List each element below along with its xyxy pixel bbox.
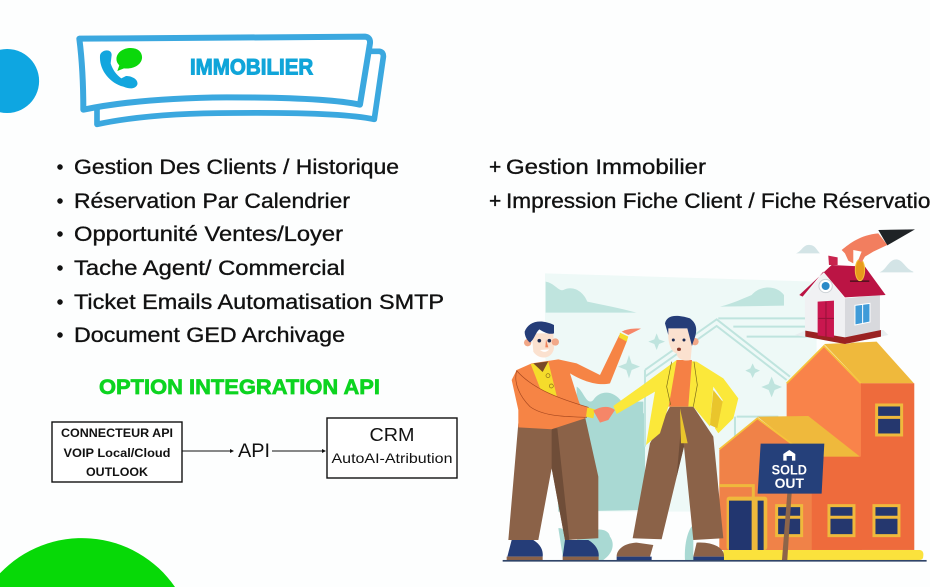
jacket bbox=[613, 360, 738, 445]
man in orange jacket bbox=[507, 322, 641, 560]
list item 4: Tache Agent/ Commercial bbox=[74, 257, 345, 280]
box: connecteur api: VOIP Local/Cloud bbox=[64, 446, 170, 460]
list item 1: Gestion Des Clients / Historique bbox=[74, 156, 399, 179]
sold out sign: OUT bbox=[775, 475, 804, 491]
box: crm: CRM bbox=[370, 425, 414, 445]
feature list: right column bbox=[489, 156, 930, 213]
sold out sign: SOLD bbox=[772, 462, 807, 478]
list item 3: Opportunité Ventes/Loyer bbox=[74, 223, 343, 246]
title banner bbox=[79, 37, 383, 124]
lower right windows bbox=[829, 506, 899, 536]
heading: option integration api: OPTION INTEGRATION API bbox=[99, 376, 380, 399]
right item 1: + bbox=[489, 156, 501, 179]
hand with suit sleeve bbox=[842, 229, 915, 263]
large orange house bbox=[787, 342, 914, 550]
man in yellow jacket bbox=[593, 316, 738, 560]
shoes bbox=[507, 540, 599, 557]
small house on roof bbox=[795, 256, 888, 344]
ground line bbox=[503, 560, 927, 562]
label: api: API bbox=[238, 441, 270, 462]
shoes bbox=[617, 543, 724, 557]
blue decorative circle bbox=[0, 49, 39, 113]
raised hand bbox=[622, 329, 641, 335]
trousers bbox=[633, 407, 723, 540]
box: crm bbox=[327, 418, 457, 478]
door bbox=[719, 486, 767, 551]
trousers bbox=[508, 417, 598, 540]
arrow: api to crm bbox=[272, 449, 326, 453]
icon: green speech bubble bbox=[116, 48, 142, 71]
small orange house bbox=[719, 416, 860, 551]
banner front sheet bbox=[79, 37, 370, 110]
banner back sheet bbox=[97, 51, 383, 124]
sleeve bbox=[516, 371, 588, 417]
handshake bbox=[593, 407, 615, 423]
box: crm: AutoAI-Atribution bbox=[332, 450, 452, 466]
right item 2: Impression Fiche Client / Fiche Réservation bbox=[506, 190, 930, 213]
real estate illustration bbox=[503, 229, 927, 562]
list item 5: Ticket Emails Automatisation SMTP bbox=[74, 291, 444, 314]
coin bbox=[855, 259, 865, 281]
head bbox=[668, 328, 692, 361]
right item 1: Gestion Immobilier bbox=[506, 156, 706, 179]
banner title text: IMMOBILIER bbox=[190, 54, 313, 79]
right item 2: + bbox=[489, 190, 501, 213]
head bbox=[532, 333, 554, 358]
sold out sign bbox=[758, 444, 824, 560]
window bbox=[777, 506, 802, 536]
box: connecteur api bbox=[52, 422, 182, 482]
feature list: left column bbox=[57, 156, 444, 347]
small clouds bbox=[796, 245, 913, 272]
shirt bbox=[669, 360, 692, 407]
arrow: connector to api bbox=[182, 449, 234, 453]
box: connecteur api: CONNECTEUR API bbox=[61, 426, 173, 440]
jacket bbox=[512, 335, 627, 429]
list item 6: Document GED Archivage bbox=[74, 324, 345, 347]
shirt bbox=[531, 362, 557, 398]
green decorative circle bbox=[0, 538, 175, 587]
upper window bbox=[877, 405, 902, 435]
box: connecteur api: OUTLOOK bbox=[86, 465, 148, 479]
yellow pavement bbox=[723, 550, 923, 560]
illustration backdrop bbox=[545, 273, 817, 560]
list item 2: Réservation Par Calendrier bbox=[74, 190, 350, 213]
icon: phone bbox=[100, 50, 137, 88]
